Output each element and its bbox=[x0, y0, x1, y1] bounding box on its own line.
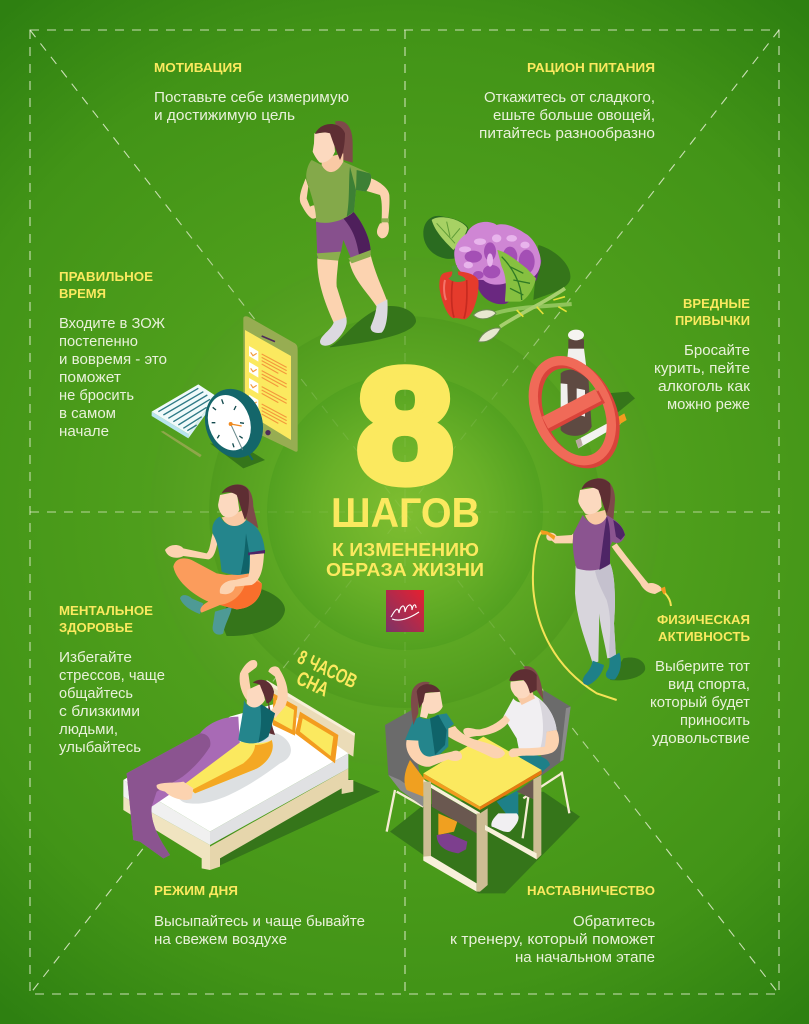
text: наставничество: к тренеру, который поможет bbox=[450, 932, 655, 948]
text: рацион питания: ешьте больше овощей, bbox=[493, 108, 655, 124]
text: ментальное здоровье bbox=[59, 603, 165, 756]
text: режим дня: на свежем воздухе bbox=[154, 932, 287, 948]
text: мотивация: Поставьте себе измеримую bbox=[154, 90, 349, 106]
text: физическая активность: АКТИВНОСТЬ bbox=[658, 629, 750, 644]
text: рацион питания bbox=[479, 60, 655, 142]
heading: 8 шагов: К ИЗМЕНЕНИЮ bbox=[332, 540, 479, 560]
text: вредные привычки: курить, пейте bbox=[654, 361, 750, 377]
text: мотивация bbox=[154, 60, 349, 124]
illustration: mentoring at table bbox=[385, 666, 580, 893]
text: ментальное здоровье: людьми, bbox=[59, 722, 118, 738]
text: режим дня bbox=[154, 883, 365, 948]
text: физическая активность: ФИЗИЧЕСКАЯ bbox=[657, 612, 750, 627]
heading: 8 шагов: ОБРАЗА ЖИЗНИ bbox=[326, 560, 484, 580]
text: ментальное здоровье: МЕНТАЛЬНОЕ bbox=[59, 603, 153, 618]
text: режим дня: РЕЖИМ ДНЯ bbox=[154, 883, 238, 898]
text: физическая активность: Выберите тот bbox=[655, 659, 750, 675]
text: рацион питания: РАЦИОН ПИТАНИЯ bbox=[527, 60, 655, 75]
text: мотивация: МОТИВАЦИЯ bbox=[154, 60, 242, 75]
text: вредные привычки bbox=[654, 296, 751, 413]
text: наставничество: НАСТАВНИЧЕСТВО bbox=[527, 883, 655, 898]
logo bbox=[386, 590, 424, 632]
text: правильное время: поможет bbox=[59, 370, 121, 386]
text: физическая активность: приносить bbox=[680, 713, 750, 729]
text: рацион питания: Откажитесь от сладкого, bbox=[484, 90, 655, 106]
text: правильное время: и вовремя - это bbox=[59, 352, 167, 368]
text: физическая активность: удовольствие bbox=[652, 731, 750, 747]
illustration: bed with stretching woman bbox=[123, 660, 380, 870]
label: 8 часов сна: СНА bbox=[293, 668, 332, 701]
text: правильное время: в самом bbox=[59, 406, 116, 422]
text: вредные привычки: можно реже bbox=[667, 397, 750, 413]
text: вредные привычки: ПРИВЫЧКИ bbox=[675, 313, 750, 328]
text: физическая активность: который будет bbox=[650, 695, 750, 711]
text: рацион питания: питайтесь разнообразно bbox=[479, 126, 655, 142]
text: вредные привычки: алкоголь как bbox=[658, 379, 751, 395]
text: правильное время: ВРЕМЯ bbox=[59, 286, 106, 301]
label: 8 часов сна: 8 ЧАСОВ bbox=[294, 647, 360, 693]
text: физическая активность: вид спорта, bbox=[668, 677, 750, 693]
illustration: no smoking and alcohol sign bbox=[518, 330, 635, 476]
text: правильное время: постепенно bbox=[59, 334, 138, 350]
text: наставничество: на начальном этапе bbox=[515, 950, 655, 966]
concentric circles bbox=[150, 257, 660, 767]
text: наставничество: Обратитесь bbox=[573, 914, 655, 930]
illustration: clock, tablet and notes bbox=[152, 316, 298, 468]
heading: 8 шагов bbox=[326, 336, 484, 580]
text: физическая активность bbox=[650, 612, 750, 747]
illustration: meditating woman bbox=[165, 484, 285, 636]
illustration: woman jumping rope bbox=[533, 478, 671, 700]
heading: 8 шагов: ШАГОВ bbox=[331, 489, 480, 536]
text: правильное время: начале bbox=[59, 424, 109, 440]
text: ментальное здоровье: общайтесь bbox=[59, 686, 133, 702]
illustration: vegetables bbox=[423, 216, 572, 342]
text: мотивация: и достижимую цель bbox=[154, 108, 295, 124]
illustration: running woman bbox=[300, 121, 416, 347]
text: ментальное здоровье: ЗДОРОВЬЕ bbox=[59, 620, 133, 635]
text: вредные привычки: ВРЕДНЫЕ bbox=[683, 296, 750, 311]
text: ментальное здоровье: с близкими bbox=[59, 704, 140, 720]
text: правильное время: не бросить bbox=[59, 388, 134, 404]
text: правильное время bbox=[59, 269, 167, 440]
text: правильное время: Входите в ЗОЖ bbox=[59, 316, 166, 332]
text: ментальное здоровье: улыбайтесь bbox=[59, 740, 141, 756]
heading: 8 шагов: 8 bbox=[357, 336, 453, 515]
text: режим дня: Высыпайтесь и чаще бывайте bbox=[154, 914, 365, 930]
text: правильное время: ПРАВИЛЬНОЕ bbox=[59, 269, 153, 284]
text: вредные привычки: Бросайте bbox=[684, 343, 750, 359]
text: наставничество bbox=[450, 883, 655, 966]
text: ментальное здоровье: стрессов, чаще bbox=[59, 668, 165, 684]
text: ментальное здоровье: Избегайте bbox=[59, 650, 132, 666]
